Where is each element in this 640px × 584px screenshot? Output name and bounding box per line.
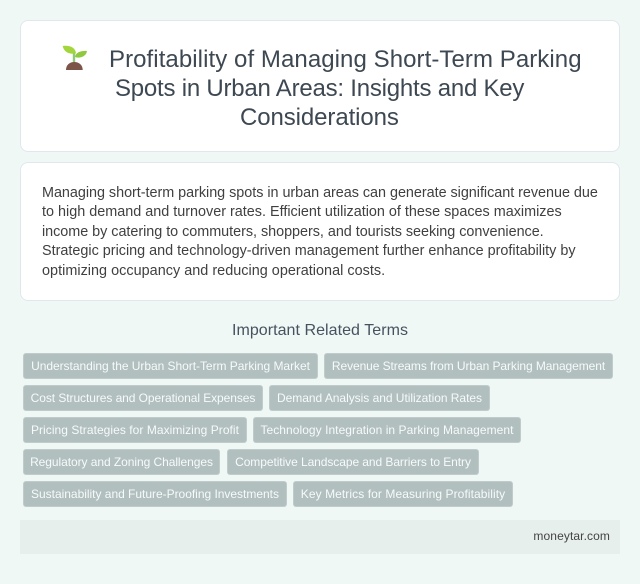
tag: Sustainability and Future-Proofing Investments <box>31 487 279 501</box>
title: Profitability of Managing Short-Term Parking <box>109 46 582 72</box>
title: Considerations <box>240 104 399 130</box>
tag: Demand Analysis and Utilization Rates <box>277 391 482 405</box>
tag: Regulatory and Zoning Challenges <box>30 455 213 469</box>
intro text <box>42 185 598 279</box>
related terms tags <box>23 353 613 507</box>
tag <box>324 353 613 379</box>
intro text: Strategic pricing and technology-driven management further enhance profitability by <box>42 243 576 259</box>
footer bar <box>20 520 620 554</box>
tag: Revenue Streams from Urban Parking Management <box>332 359 605 373</box>
intro text: Managing short-term parking spots in urban areas can generate significant revenue due <box>42 185 598 201</box>
tag <box>227 449 479 475</box>
tag <box>23 353 318 379</box>
footer source text: moneytar.com <box>533 529 610 543</box>
intro text: to high demand and turnover rates. Efficient utilization of these spaces maximizes <box>42 204 562 220</box>
tag <box>293 481 513 507</box>
related terms heading: Important Related Terms <box>232 322 408 339</box>
tag <box>23 481 287 507</box>
tag <box>23 417 247 443</box>
intro text: optimizing occupancy and reducing operational costs. <box>42 263 385 279</box>
tag: Understanding the Urban Short-Term Parking Market <box>31 359 310 373</box>
title: Spots in Urban Areas: Insights and Key <box>115 74 524 102</box>
tag: Cost Structures and Operational Expenses <box>31 391 255 405</box>
tag: Competitive Landscape and Barriers to Entry <box>235 455 471 469</box>
intro panel <box>20 162 620 301</box>
intro text: income by catering to commuters, shoppers, and tourists seeking convenience. <box>42 224 544 240</box>
tag <box>23 449 220 475</box>
tag <box>23 385 263 411</box>
tag <box>253 417 521 443</box>
tag: Technology Integration in Parking Management <box>260 423 514 437</box>
tag <box>269 385 490 411</box>
icon: seedling <box>62 46 87 70</box>
tag: Key Metrics for Measuring Profitability <box>301 487 505 501</box>
header panel <box>20 20 620 152</box>
tag: Pricing Strategies for Maximizing Profit <box>31 423 239 437</box>
title <box>109 46 582 130</box>
